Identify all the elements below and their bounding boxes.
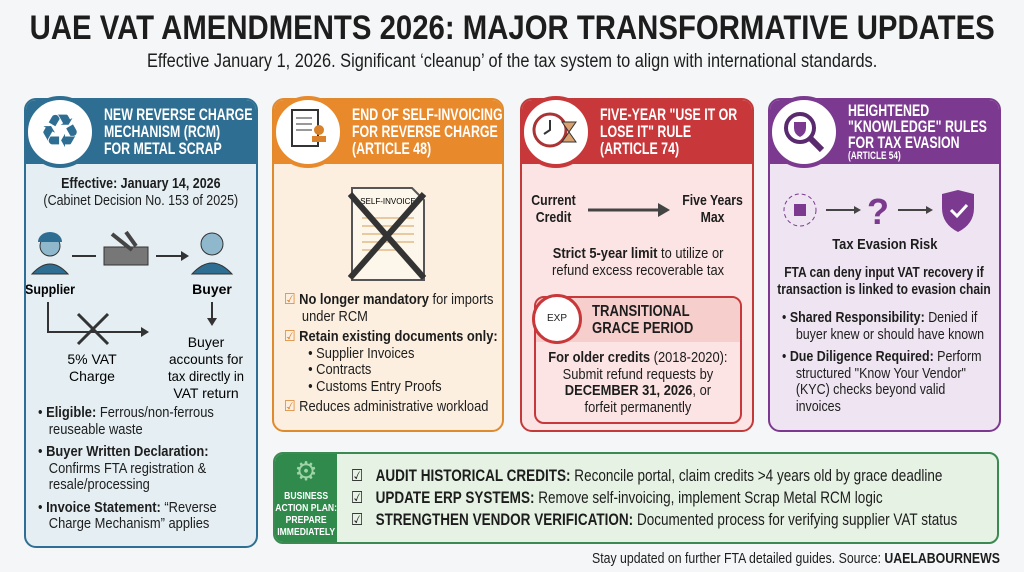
callout: transitional grace period: Submit refund requests by: [563, 366, 713, 382]
flow diagram: supplier to buyer: Buyer: [188, 334, 225, 350]
panel: self-invoicing: [272, 98, 504, 432]
bullets: knowledge rules: • Shared Responsibility: Denied if: [782, 309, 977, 326]
diagram: tax evasion risk: Tax Evasion Risk: [832, 236, 937, 253]
bullets: knowledge rules: invoices: [796, 398, 841, 414]
icon: document stamp: [272, 96, 344, 168]
panel: metal scrap RCM: [24, 98, 258, 548]
bullets: knowledge rules: • Due Diligence Required: Perform: [782, 348, 981, 365]
bullets: RCM details: Confirms FTA registration &: [49, 460, 206, 476]
icon: crossed self-invoice: [348, 187, 426, 281]
text: FTA can deny: transaction is linked to evasion chain: [777, 281, 991, 298]
checklist: self-invoicing: [284, 291, 498, 415]
text: strict limit: [552, 245, 724, 279]
icon: calendar exp: EXP: [547, 313, 567, 324]
panel: five-year rule: [520, 98, 754, 432]
bullets: RCM details: reuseable waste: [49, 420, 143, 438]
bullets: RCM details: resale/processing: [49, 476, 150, 493]
diagram: current credit to five years: Credit: [536, 209, 571, 226]
panel: business action plan: [273, 452, 999, 544]
checklist: self-invoicing: under RCM: [302, 308, 368, 324]
callout: transitional grace period: forfeit permanently: [584, 398, 691, 416]
subtitle: Effective January 1, 2026. Significant ‘cleanup’ of the tax system to align with international standards.: [147, 51, 877, 72]
header: self-invoicing: (ARTICLE 48): [352, 140, 431, 158]
footer source: Stay updated on further FTA detailed guides. Source: UAELABOURNEWS: [592, 550, 1000, 567]
header: five-year rule: (ARTICLE 74): [600, 140, 679, 158]
flow diagram: supplier to buyer: Charge: [69, 368, 115, 384]
bullets: RCM details: • Invoice Statement: “Reverse: [38, 498, 217, 516]
bullets: RCM details: • Buyer Written Declaration:: [38, 443, 209, 460]
flow diagram: supplier to buyer: Supplier: [26, 281, 75, 297]
icon: recycle: [24, 96, 96, 168]
icon: calendar exp: [532, 294, 582, 344]
header: RCM: MECHANISM (RCM): [104, 122, 220, 140]
diagram: current credit to five years: Current: [531, 192, 576, 209]
icon: crossed self-invoice: SELF-INVOICE: [360, 197, 416, 206]
diagram: current credit to five years: Five Years: [682, 192, 743, 209]
checklist: actions: STRENGTHEN VENDOR VERIFICATION: Documented process for verifying supplier VAT status: [376, 511, 957, 529]
diagram: tax evasion risk: ?: [867, 191, 889, 232]
text: strict limit: Strict 5-year limit to utilize or: [553, 245, 723, 262]
bullets: RCM details: Charge Mechanism” applies: [49, 515, 209, 532]
diagram: current credit to five years: [531, 192, 743, 226]
header: five-year rule: [522, 100, 752, 164]
callout: transitional grace period: For older credits (2018-2020):: [548, 349, 728, 366]
checklist: actions: ☑: [351, 489, 363, 507]
bullets: RCM details: [38, 404, 217, 532]
header: knowledge rules: HEIGHTENED: [848, 102, 929, 120]
checklist: self-invoicing: • Customs Entry Proofs: [308, 378, 442, 394]
bullets: RCM details: • Eligible: Ferrous/non-ferrous: [38, 404, 214, 421]
checklist: actions: ☑: [351, 511, 363, 529]
header: self-invoicing: END OF SELF-INVOICING: [352, 106, 503, 124]
icon: magnifier shield: [768, 96, 840, 168]
icon: clock and hourglass: [520, 96, 592, 168]
bullets: knowledge rules: (KYC) checks beyond valid: [796, 381, 945, 398]
checklist: actions: UPDATE ERP SYSTEMS: Remove self-invoicing, implement Scrap Metal RCM logic: [376, 489, 883, 507]
bullets: knowledge rules: [782, 309, 984, 414]
diagram: tax evasion risk: [784, 190, 974, 253]
text: strict limit: refund excess recoverable tax: [552, 262, 724, 279]
checklist: actions: [351, 467, 957, 529]
callout: transitional grace period: [534, 296, 742, 424]
flow diagram: supplier to buyer: tax directly in: [168, 368, 244, 384]
diagram: current credit to five years: Max: [701, 209, 725, 226]
header: five-year rule: LOSE IT" RULE: [600, 122, 691, 140]
header: knowledge rules: FOR TAX EVASION: [848, 134, 960, 152]
effective date: Effective: January 14, 2026: [61, 176, 221, 192]
title: UAE VAT AMENDMENTS 2026: MAJOR TRANSFORMATIVE UPDATES: [30, 9, 995, 47]
effective date: (Cabinet Decision No. 153 of 2025): [43, 193, 238, 209]
text: FTA can deny: FTA can deny input VAT recovery if: [784, 264, 984, 281]
header: RCM: [26, 100, 256, 164]
flow diagram: supplier to buyer: accounts for: [169, 351, 243, 367]
icon: recycle: ♻: [39, 105, 81, 157]
flow diagram: supplier to buyer: [26, 230, 244, 398]
callout: transitional grace period: DECEMBER 31, 2026, or: [565, 382, 711, 399]
flow diagram: supplier to buyer: 5% VAT: [67, 351, 117, 367]
header: knowledge rules: [770, 100, 999, 164]
header: RCM: FOR METAL SCRAP: [104, 140, 222, 158]
text: FTA can deny: [777, 264, 991, 298]
header: self-invoicing: FOR REVERSE CHARGE: [352, 122, 498, 140]
bullets: knowledge rules: buyer knew or should have known: [796, 326, 984, 342]
panel: business action plan: BUSINESS ACTION PLAN: PREPARE IMMEDIATELY: [275, 490, 337, 538]
checklist: actions: AUDIT HISTORICAL CREDITS: Reconcile portal, claim credits >4 years old by grace deadline: [376, 467, 942, 485]
checklist: self-invoicing: ☑ Reduces administrative workload: [284, 398, 488, 415]
header: five-year rule: FIVE-YEAR "USE IT OR: [600, 106, 737, 124]
checklist: actions: ☑: [351, 467, 363, 485]
header: RCM: NEW REVERSE CHARGE: [104, 106, 253, 124]
callout: transitional grace period: GRACE PERIOD: [592, 320, 693, 337]
checklist: self-invoicing: ☑ No longer mandatory for imports: [284, 291, 493, 308]
flow diagram: supplier to buyer: Buyer: [192, 281, 232, 297]
callout: transitional grace period: TRANSITIONAL: [592, 303, 690, 320]
label: action plan: [275, 454, 337, 546]
header: self-invoicing: [274, 100, 502, 164]
effective date: [43, 176, 238, 209]
bullets: knowledge rules: structured "Know Your Vendor": [796, 364, 966, 382]
header: knowledge rules: (ARTICLE 54): [848, 150, 901, 162]
icon: gears: ⚙: [294, 456, 318, 486]
checklist: self-invoicing: • Supplier Invoices: [308, 344, 414, 362]
checklist: self-invoicing: • Contracts: [308, 361, 371, 378]
panel: knowledge rules: [768, 98, 1001, 432]
header: knowledge rules: "KNOWLEDGE" RULES: [848, 118, 987, 136]
checklist: self-invoicing: ☑ Retain existing documents only:: [284, 328, 498, 345]
